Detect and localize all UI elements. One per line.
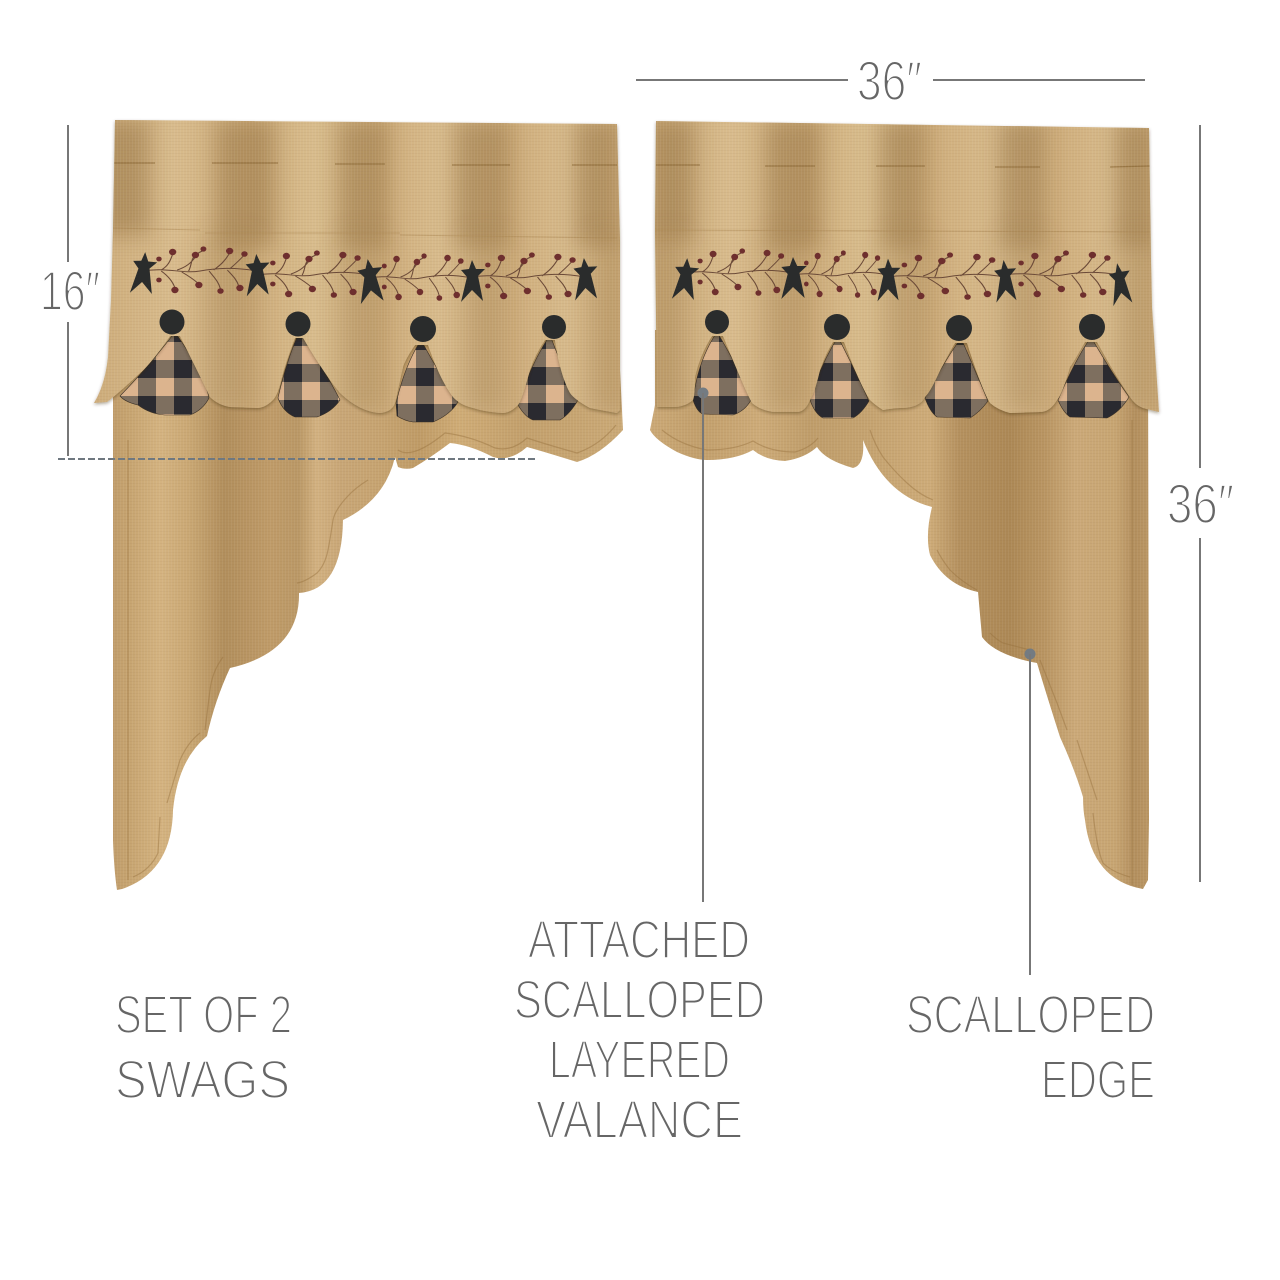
- pointer: scalloped edge: [1024, 648, 1036, 975]
- right swag curtain: [645, 115, 1165, 895]
- label: attached scalloped layered valance: LAYERED: [549, 1030, 730, 1090]
- right swag stars: [672, 257, 1134, 306]
- left swag check tabs: [120, 332, 578, 422]
- label: attached scalloped layered valance: ATTACHED: [528, 910, 750, 970]
- label: set of 2 swags: SET OF 2: [115, 985, 292, 1045]
- label: attached scalloped layered valance: SCALLOPED: [514, 970, 765, 1030]
- label: set of 2 swags: [115, 985, 292, 1110]
- label: attached scalloped layered valance: [514, 910, 765, 1150]
- right swag embroidered vine: [685, 248, 1120, 300]
- right swag back panel with scalloped edge: [645, 325, 1155, 895]
- label: scalloped edge: EDGE: [1041, 1050, 1155, 1110]
- dimension: top width 36 inches: 36″: [857, 49, 922, 112]
- dimension: right height 36 inches: 36″: [1167, 472, 1234, 535]
- left swag embroidered vine: [143, 246, 585, 301]
- label: scalloped edge: [906, 985, 1155, 1110]
- right swag check tabs: [693, 332, 1129, 418]
- left swag stars: [130, 251, 599, 304]
- dimension: left height 16 inches: 16″: [40, 259, 100, 322]
- left swag layered valance: [90, 115, 625, 420]
- label: attached scalloped layered valance: VALANCE: [536, 1090, 743, 1150]
- left swag curtain: [90, 115, 630, 895]
- label: set of 2 swags: SWAGS: [115, 1050, 290, 1110]
- right swag layered valance: [650, 115, 1165, 420]
- left swag buttons: [160, 310, 566, 342]
- pointer: layered valance: [698, 388, 708, 902]
- label: scalloped edge: SCALLOPED: [906, 985, 1155, 1045]
- right swag buttons: [705, 310, 1105, 341]
- left swag back panel with scalloped edge: [90, 325, 630, 895]
